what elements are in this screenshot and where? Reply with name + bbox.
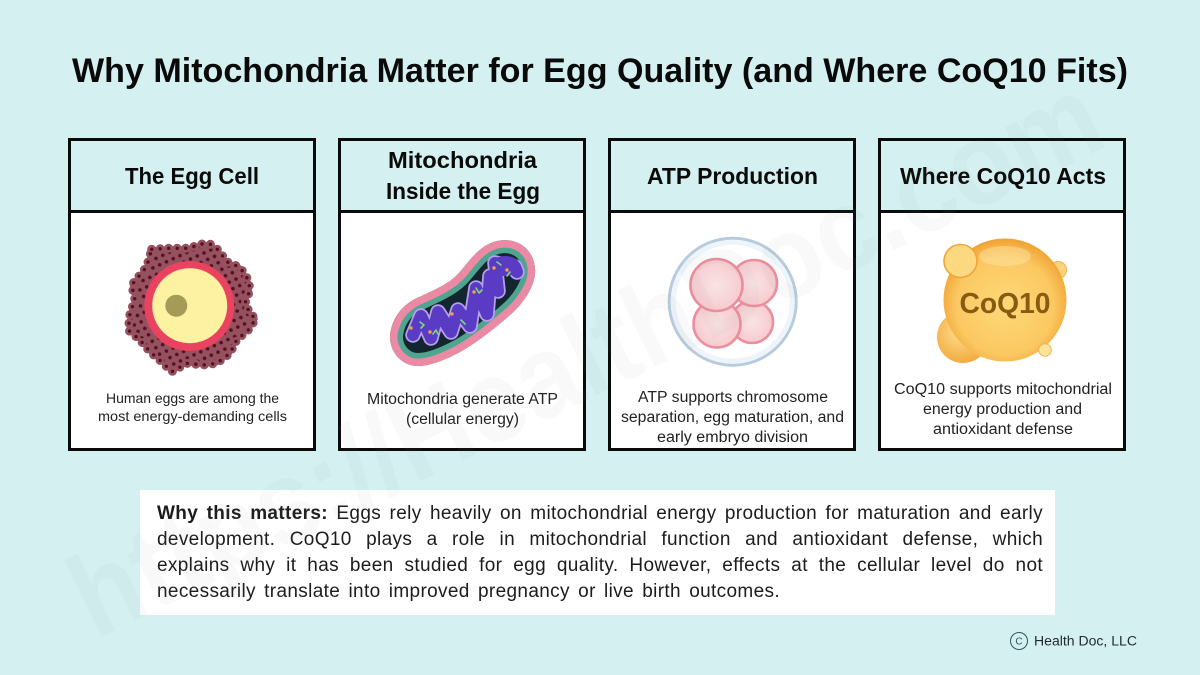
heading: ATP production: ATP Production: [647, 163, 818, 189]
credit: Health Doc, LLC: [1010, 632, 1137, 650]
caption: ATP production: separation, egg maturation, and: [621, 409, 844, 426]
icon: CoQ10 bubble: [937, 238, 1066, 363]
card frame: [880, 140, 1124, 450]
text block: why this matters: explains why it has been studied for egg quality. However, effects at the cellular level do not: [157, 555, 1043, 576]
caption: mitochondria: (cellular energy): [406, 411, 519, 428]
infographic cards and title: [68, 57, 1136, 650]
card frame: [610, 140, 854, 450]
icon: CoQ10 bubble: CoQ10: [960, 288, 1050, 320]
title: Why Mitochondria Matter for Egg Quality (and Where CoQ10 Fits): [72, 52, 1128, 90]
panel: the egg cell: [70, 140, 314, 450]
caption: the egg cell: Human eggs are among the: [106, 390, 279, 406]
card header band: [880, 140, 1124, 212]
heading: mitochondria inside the egg: Mitochondria: [388, 147, 537, 173]
text block: why this matters: development. CoQ10 plays a role in mitochondrial function and antioxidant defense, which: [157, 529, 1043, 550]
panel: ATP production: [610, 140, 854, 450]
caption: ATP production: [621, 389, 844, 446]
heading: where CoQ10 acts: Where CoQ10 Acts: [900, 163, 1106, 189]
card header band: [610, 140, 854, 212]
text block: why this matters: Why this matters: Eggs rely heavily on mitochondrial energy production for maturation and early: [157, 503, 1043, 524]
icon: dividing embryo: [669, 238, 796, 365]
credit: Health Doc, LLC: C: [1015, 636, 1023, 648]
card header band: [340, 140, 584, 212]
caption: the egg cell: most energy-demanding cells: [98, 408, 287, 424]
panel: where CoQ10 acts: [880, 140, 1124, 450]
icon: egg cell: [128, 244, 256, 372]
caption: where CoQ10 acts: CoQ10 supports mitochondrial: [894, 381, 1112, 398]
caption: mitochondria: Mitochondria generate ATP: [367, 391, 558, 408]
icon: mitochondrion: [390, 240, 535, 366]
card frame: [70, 140, 314, 450]
caption: ATP production: early embryo division: [657, 429, 808, 446]
caption: ATP production: ATP supports chromosome: [638, 389, 828, 406]
text block: why this matters: necessarily translate into improved pregnancy or live birth outcomes.: [157, 581, 780, 602]
card frame: [340, 140, 584, 450]
heading: the egg cell: The Egg Cell: [125, 163, 259, 189]
heading: mitochondria inside the egg: Inside the Egg: [386, 178, 540, 204]
heading: mitochondria inside the egg: [386, 147, 540, 204]
caption: the egg cell: [98, 390, 287, 424]
panel: mitochondria inside the egg: [340, 140, 584, 450]
caption: mitochondria: [367, 391, 558, 428]
card header band: [70, 140, 314, 212]
caption: where CoQ10 acts: energy production and: [923, 401, 1082, 418]
caption: where CoQ10 acts: [894, 381, 1112, 438]
text block: why this matters: [140, 490, 1055, 615]
caption: where CoQ10 acts: antioxidant defense: [933, 421, 1073, 438]
credit: Health Doc, LLC: Health Doc, LLC: [1034, 634, 1137, 648]
